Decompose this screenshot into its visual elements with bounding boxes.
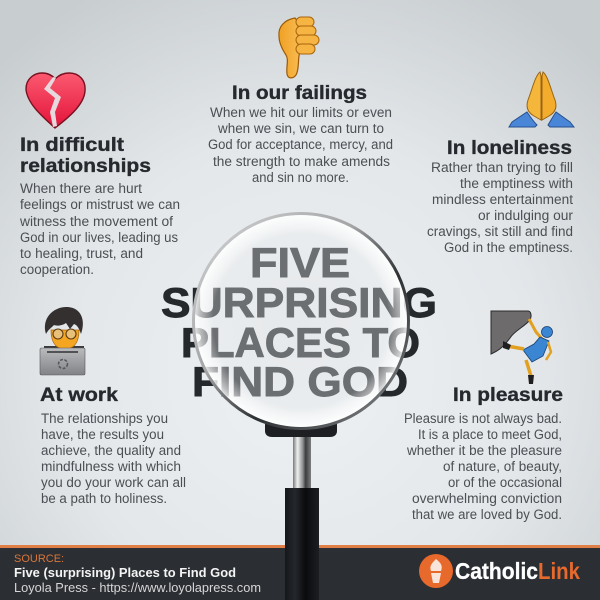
magnifying glass: PLACES TO bbox=[181, 319, 420, 366]
text: pleasure body: overwhelming conviction bbox=[412, 491, 562, 506]
text: loneliness body: mindless entertainment bbox=[432, 192, 573, 207]
text: relationships body: cooperation. bbox=[20, 262, 94, 277]
source credit: Five (surprising) Places to Find God bbox=[14, 565, 236, 580]
text: pleasure body: whether it be the pleasure bbox=[406, 443, 562, 458]
title bbox=[161, 239, 437, 405]
magnifying glass bbox=[192, 212, 410, 600]
text: loneliness body: cravings, sit still and find bbox=[427, 224, 573, 239]
text: work body: have, the results you bbox=[41, 427, 164, 442]
icon: praying hands bbox=[509, 72, 574, 127]
heading: at work: At work bbox=[40, 385, 118, 406]
text: failings body: when we sin, we can turn to bbox=[217, 121, 384, 136]
text: work body: mindfulness with which bbox=[41, 459, 181, 474]
text: relationships body: witness the movement of bbox=[19, 214, 173, 229]
title: PLACES TO bbox=[181, 319, 420, 366]
text: failings body: the strength to make amends bbox=[213, 154, 390, 169]
text: loneliness body: God in the emptiness. bbox=[444, 240, 573, 255]
icon: broken heart bbox=[26, 73, 85, 128]
text: pleasure body: of nature, of beauty, bbox=[443, 459, 562, 474]
heading: in loneliness: In loneliness bbox=[447, 138, 572, 159]
text: pleasure body: It is a place to meet God, bbox=[418, 427, 562, 442]
text: failings body bbox=[208, 105, 393, 185]
heading: in our failings: In our failings bbox=[232, 83, 367, 104]
source credit bbox=[14, 553, 261, 595]
text: failings body: When we hit our limits or even bbox=[210, 105, 392, 120]
source credit: Loyola Press - https://www.loyolapress.com bbox=[14, 580, 261, 595]
title: FIVE bbox=[250, 239, 350, 286]
heading: in pleasure: In pleasure bbox=[453, 385, 563, 406]
logo: Catholic Link: Link bbox=[538, 558, 580, 584]
magnifying glass: FIVE bbox=[250, 239, 350, 286]
text: work body: be a path to holiness. bbox=[41, 491, 167, 506]
text: pleasure body: Pleasure is not always bad. bbox=[404, 411, 562, 426]
text: relationships body bbox=[19, 181, 180, 277]
text: relationships body: God in our lives, leading us bbox=[20, 230, 178, 245]
text: relationships body: feelings or mistrust we can bbox=[20, 197, 180, 212]
text: pleasure body: or of the occasional bbox=[448, 475, 562, 490]
icon: rock climber bbox=[491, 311, 552, 384]
text: work body: The relationships you bbox=[41, 411, 168, 426]
text: loneliness body: or indulging our bbox=[478, 208, 573, 223]
magnifying glass: SURPRISING bbox=[161, 279, 437, 326]
icon: person at laptop bbox=[40, 307, 85, 375]
text: pleasure body: that we are loved by God. bbox=[412, 507, 562, 522]
text: work body: you do your work can all bbox=[41, 475, 186, 490]
heading: in difficult relationships: In difficult bbox=[20, 135, 125, 156]
footer bar bbox=[0, 545, 600, 600]
logo: Catholic Link bbox=[419, 554, 580, 588]
icon: thumbs down bbox=[279, 17, 319, 78]
text: loneliness body: Rather than trying to fill bbox=[431, 160, 573, 175]
title: FIND GOD bbox=[192, 358, 408, 405]
text: pleasure body bbox=[404, 411, 562, 522]
text: relationships body: to healing, trust, and bbox=[20, 246, 143, 261]
text: loneliness body bbox=[427, 160, 573, 255]
magnifying glass: FIND GOD bbox=[192, 358, 408, 405]
title: SURPRISING bbox=[161, 279, 437, 326]
text: loneliness body: the emptiness with bbox=[460, 176, 573, 191]
text: work body bbox=[41, 411, 186, 506]
text: work body: achieve, the quality and bbox=[41, 443, 181, 458]
logo: Catholic Link: Catholic bbox=[455, 558, 538, 584]
heading: in difficult relationships bbox=[20, 135, 151, 177]
text: failings body: and sin no more. bbox=[252, 170, 349, 185]
text: failings body: God for acceptance, mercy, and bbox=[208, 137, 393, 152]
heading: in difficult relationships: relationships bbox=[20, 156, 151, 177]
source credit: SOURCE: bbox=[14, 553, 64, 565]
text: relationships body: When there are hurt bbox=[20, 181, 142, 196]
